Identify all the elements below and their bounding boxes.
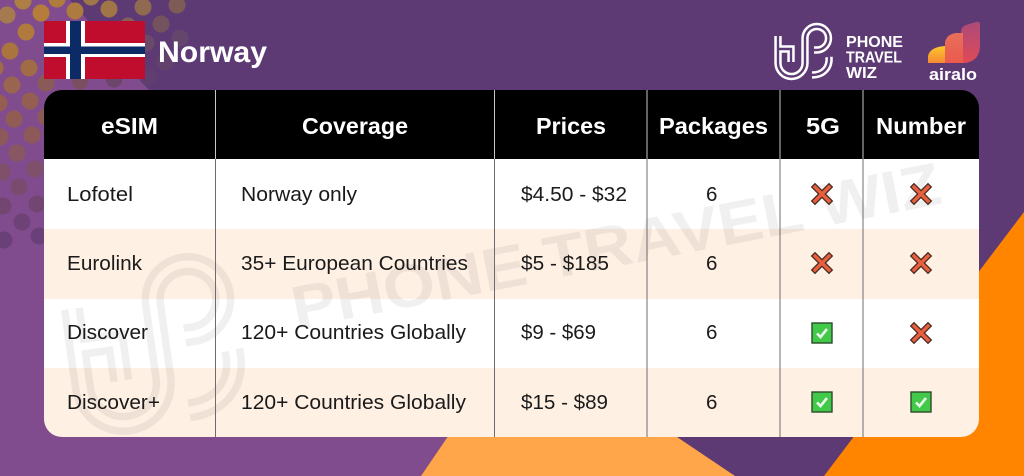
row: Discover: $9 - $69 <box>521 321 596 344</box>
table rows background <box>44 90 979 437</box>
airalo bars <box>928 22 980 63</box>
background: light orange shape <box>421 360 735 476</box>
row: Discover+: Discover+ <box>67 391 160 414</box>
row: Lofotel: Norway only <box>241 183 358 206</box>
row: Lofotel: 6 <box>706 183 717 206</box>
header row: Packages <box>659 113 768 139</box>
row: Discover: 6 <box>706 321 717 344</box>
watermark <box>61 163 942 435</box>
flag of Norway <box>44 21 145 79</box>
row: Eurolink <box>67 252 928 275</box>
logo wordmark: WIZ <box>846 65 878 82</box>
logo: airalo <box>928 22 980 84</box>
icon: no 5G <box>815 187 829 201</box>
logo wordmark: TRAVEL <box>846 50 902 66</box>
header row <box>101 113 966 139</box>
row: Lofotel <box>67 183 928 206</box>
row: Discover+: 120+ Countries Globally <box>241 391 467 414</box>
row: Discover: 120+ Countries Globally <box>241 321 467 344</box>
icon: no number <box>914 256 928 270</box>
row: Lofotel: $4.50 - $32 <box>521 183 627 206</box>
icon: no number <box>914 187 928 201</box>
background: bright orange shape <box>824 212 1024 476</box>
header row: Coverage <box>302 113 408 139</box>
logo wordmark: PHONE <box>846 34 903 51</box>
row: Discover: Discover <box>67 321 148 344</box>
watermark monogram <box>61 253 245 435</box>
background: halftone dots <box>0 0 188 248</box>
logo: Phone Travel Wiz <box>778 27 903 82</box>
column dividers <box>216 90 863 437</box>
row: Discover+: 6 <box>706 391 717 414</box>
icon: 5G yes <box>812 392 832 412</box>
row: Discover+: $15 - $89 <box>521 391 608 414</box>
header row: 5G <box>806 113 840 139</box>
icon: no 5G <box>815 256 829 270</box>
watermark text: PHONE TRAVEL WIZ <box>286 150 946 342</box>
row: Discover <box>67 321 928 344</box>
title: Norway: Norway <box>158 36 267 69</box>
logo monogram <box>778 27 829 76</box>
row: Eurolink: $5 - $185 <box>521 252 609 275</box>
logo wordmark <box>846 34 903 82</box>
header row: eSIM <box>101 113 158 139</box>
row: Eurolink: 6 <box>706 252 717 275</box>
airalo wordmark: airalo <box>929 65 977 84</box>
row: Eurolink: 35+ European Countries <box>241 252 468 275</box>
icon: no number <box>914 326 928 340</box>
header row: Prices <box>536 113 606 139</box>
row: Lofotel: Lofotel <box>67 183 133 206</box>
icon: number yes <box>911 392 931 412</box>
header row: Number <box>876 113 966 139</box>
comparison table <box>44 90 979 437</box>
row: Discover+ <box>67 391 931 414</box>
background: light purple shape <box>0 0 448 476</box>
row: Eurolink: Eurolink <box>67 252 143 275</box>
icon: 5G yes <box>812 323 832 343</box>
